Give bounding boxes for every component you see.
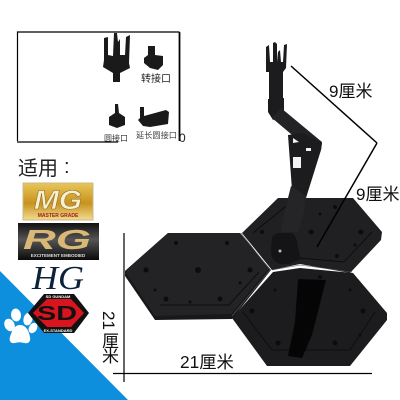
label: extended round connector: 延长圆接口	[136, 130, 177, 140]
panel: connector parts box	[17, 32, 180, 143]
dimension: horizontal 21cm line	[113, 372, 372, 374]
logo: RG exitement embodied: EXCITEMENT EMBODIED	[31, 253, 86, 258]
label: vertical 21cm characters: 厘	[102, 332, 119, 351]
icon: extended round connector	[138, 107, 169, 127]
heading: compatible with: :	[64, 156, 70, 178]
logo: MG master grade	[23, 183, 93, 220]
logo: SD gundam: EX-STANDARD	[44, 328, 73, 333]
heading: compatible with: 适用	[18, 158, 58, 180]
icon: adapter connector	[144, 46, 163, 70]
dimension: 9cm upper line	[291, 66, 377, 143]
label: horizontal 21cm: 21厘米	[180, 352, 234, 372]
logo: SD gundam: SD	[37, 303, 77, 325]
label: adapter connector: 转接口	[141, 72, 171, 85]
left hexagon	[125, 233, 271, 320]
background corner: blue triangle	[0, 271, 128, 400]
right hexagon	[232, 268, 387, 366]
dimension: vertical 21cm line	[123, 233, 125, 382]
dimension: 9cm lower line	[317, 143, 377, 247]
label: upper 9cm: 9厘米	[329, 82, 372, 101]
stray glyph beside box: 0	[179, 131, 186, 145]
gaps between hexagons	[232, 233, 352, 316]
logo: MG master grade: MASTER GRADE	[38, 213, 79, 219]
label: lower 9cm: 9厘米	[356, 185, 399, 204]
icon: fork connector	[103, 33, 130, 82]
label: vertical cm character: 米	[102, 347, 119, 366]
logo: MG master grade: MG	[34, 185, 82, 215]
lower frame	[288, 133, 322, 198]
photo: articulated stand arm	[266, 42, 322, 264]
column	[269, 72, 283, 102]
logo: RG exitement embodied: RG	[23, 224, 91, 255]
logo: RG exitement embodied	[18, 223, 99, 260]
arm reflection	[288, 279, 326, 358]
frame window	[293, 157, 301, 168]
small frame windows	[293, 138, 311, 151]
icon: round connector	[109, 104, 125, 128]
icon: white paw print	[2, 308, 39, 343]
logo: HG: HG	[31, 260, 84, 297]
label: vertical 21cm: 21	[99, 311, 118, 330]
elbow joint	[268, 98, 284, 120]
upper link	[272, 108, 322, 150]
photo: hexagonal stand base	[125, 198, 387, 366]
logo: SD gundam: SD GUNDAM	[46, 294, 71, 299]
logo: SD gundam	[28, 294, 89, 333]
fork tip	[266, 42, 287, 72]
label: round connector: 圆接口	[104, 133, 128, 143]
ratchet spine	[281, 186, 306, 232]
top hexagon	[242, 198, 382, 273]
ball joint	[271, 233, 301, 264]
